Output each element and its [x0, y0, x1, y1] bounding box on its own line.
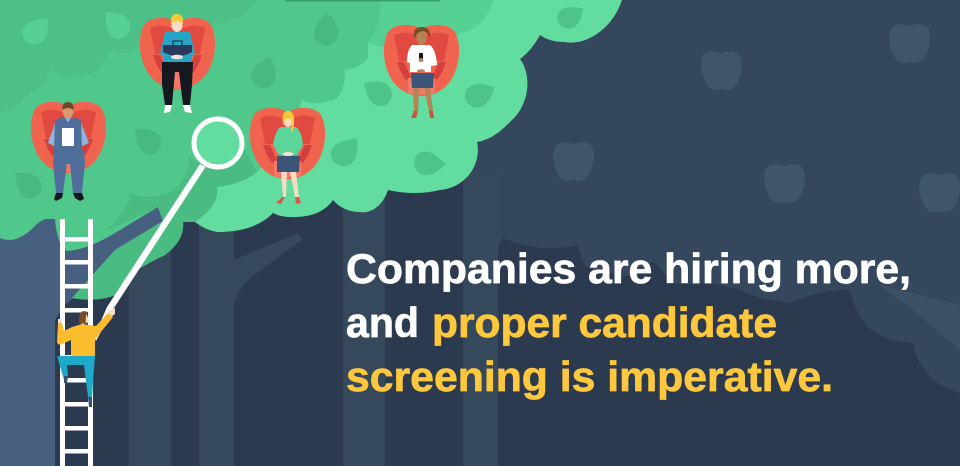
headline line 2 highlight: proper candidate	[432, 299, 777, 346]
canopy: top-left shade	[0, 0, 257, 113]
armchair 4	[384, 25, 459, 96]
canopy top strip	[285, 0, 440, 2]
person: woman in green	[273, 111, 303, 204]
canopy: light layer	[150, 0, 622, 232]
armchair 2	[140, 18, 215, 89]
ring interior	[194, 119, 242, 167]
background canopy	[463, 0, 960, 393]
ladder	[60, 219, 93, 466]
headline line 1: Companies are hiring more,	[346, 245, 911, 292]
person: man with paper	[48, 102, 89, 201]
headline	[346, 245, 911, 400]
background tree trunks	[129, 170, 498, 466]
background apples	[553, 24, 960, 212]
armchair 1	[31, 102, 106, 173]
canopy: upper band	[368, 0, 493, 50]
canopy: mid layer	[0, 0, 493, 300]
person: man with briefcase	[160, 14, 195, 113]
ring and pole tool	[94, 119, 242, 341]
headline line 3: screening is imperative.	[346, 353, 833, 400]
canopy: lower shade lobe	[72, 150, 257, 300]
leaves	[7, 0, 589, 203]
climbing man	[57, 308, 115, 407]
armchair 3	[250, 108, 325, 179]
headline line 2: and	[346, 299, 419, 346]
background branch highlight	[880, 285, 960, 350]
foreground trunk and branch	[0, 180, 163, 466]
person: woman in white with phone	[407, 27, 437, 118]
